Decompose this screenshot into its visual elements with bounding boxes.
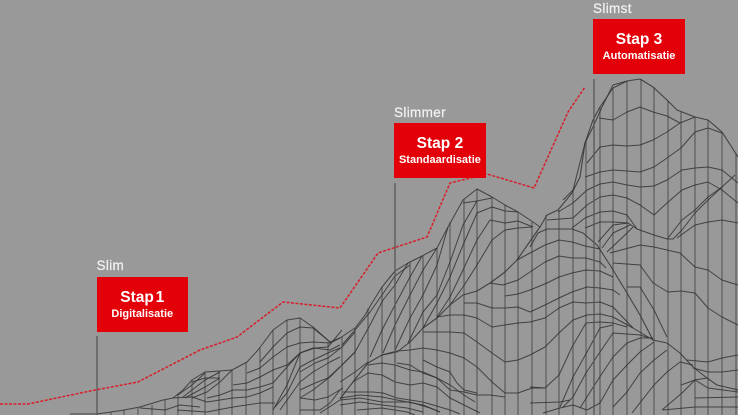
box: stap 3 (593, 19, 685, 74)
leader lines (97, 79, 594, 415)
box: stap 2 (394, 123, 486, 178)
box: stap 2: Stap 2 (417, 135, 463, 152)
dashed red trend line (0, 87, 585, 404)
front ridge of middle hill (340, 79, 738, 399)
label: Slim: Slim (96, 258, 124, 273)
main right ridge (530, 229, 738, 390)
vertical mesh lines (111, 79, 736, 415)
label: Slimmer: Slimmer (394, 105, 446, 120)
box: stap 1 (96, 277, 188, 332)
left hill (70, 189, 540, 414)
label: Slimst: Slimst (593, 1, 632, 16)
mesh contour lines (70, 79, 738, 415)
box: stap 2: Standaardisatie (399, 154, 481, 166)
leader line: stap 2 (394, 183, 396, 415)
box: stap 1: Digitalisatie (111, 308, 173, 320)
leader line: stap 3 (593, 79, 595, 415)
box: stap 3: Automatisatie (603, 50, 675, 62)
wireframe terrain mesh (70, 79, 738, 415)
box: stap 1: Stap 1 (120, 289, 164, 306)
middle hill lower contours (382, 348, 545, 393)
middle hill fans (342, 265, 410, 345)
right hill lower fans (545, 322, 627, 388)
right hill upper contours (563, 81, 627, 200)
leader line: stap 1 (96, 336, 98, 415)
box: stap 3: Stap 3 (616, 31, 662, 48)
